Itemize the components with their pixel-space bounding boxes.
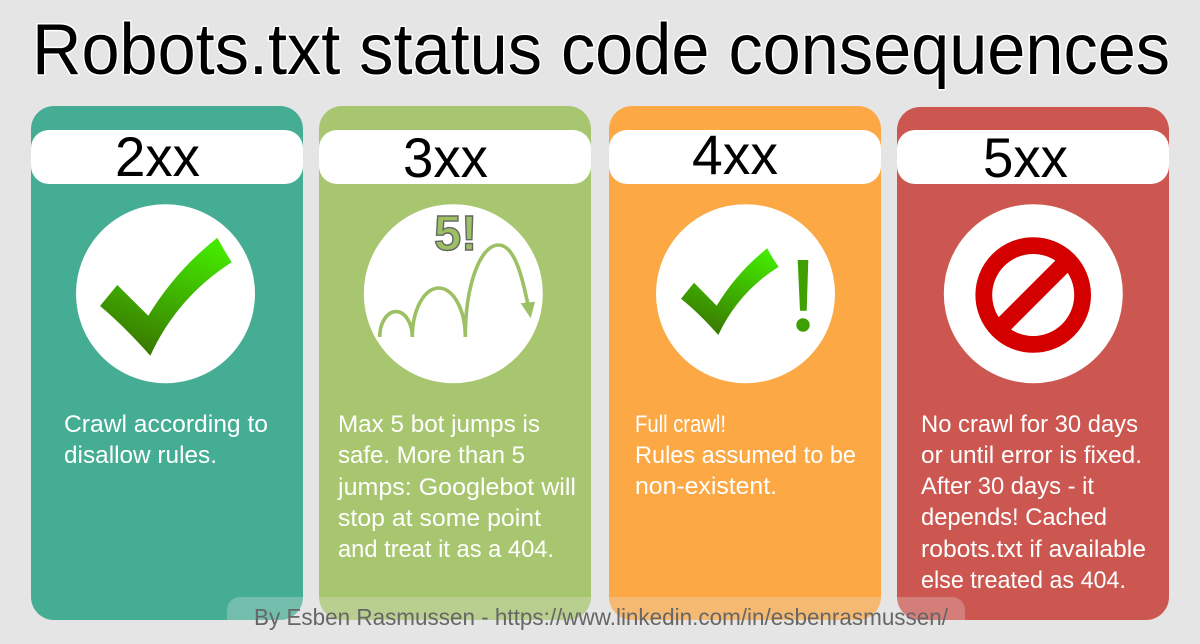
heading bar: 5xx: 5xx [983, 126, 1068, 189]
text: 5xx description: robots.txt if available [921, 536, 1146, 563]
text: 4xx description: non-existent. [635, 473, 777, 500]
text: 3xx description: safe. More than 5 [338, 442, 525, 469]
text: 4xx description [635, 411, 856, 500]
panel: 3xx [319, 106, 591, 620]
text: 4xx description: Full crawl! [635, 411, 726, 438]
arrow: bounce path [380, 245, 535, 337]
icon: prohibition sign [944, 204, 1123, 383]
icon: check with exclamation [656, 204, 835, 383]
icon: bouncing redirects [364, 204, 543, 383]
text: 2xx description [64, 411, 268, 469]
text: 3xx description: and treat it as a 404. [338, 536, 554, 563]
text: 5xx description: or until error is fixed. [921, 442, 1142, 469]
heading bar: 4xx: 4xx [692, 123, 778, 186]
heading bar: 2xx: 2xx [115, 125, 200, 188]
text: 3xx description: stop at some point [338, 505, 541, 532]
panel: 2xx [31, 106, 303, 620]
text: 5xx description: No crawl for 30 days [921, 411, 1138, 438]
footer credit: By Esben Rasmussen - https://www.linkedin.com/in/esbenrasmussen/ [254, 604, 949, 630]
text: 2xx description: disallow rules. [64, 442, 217, 469]
heading bar: 3xx: 3xx [403, 126, 488, 189]
text: 5xx description: After 30 days - it [921, 473, 1094, 500]
text: 3xx description: jumps: Googlebot will [337, 474, 576, 501]
title: Robots.txt status code consequences [32, 10, 1170, 90]
icon: green check [76, 204, 255, 383]
panel: 5xx [897, 107, 1169, 620]
text: 3xx description [337, 411, 576, 563]
heading bar: 4xx [609, 123, 881, 186]
text: 4xx description: Rules assumed to be [635, 442, 856, 469]
heading bar: 2xx [31, 125, 303, 188]
text: 5xx description: else treated as 404. [921, 567, 1126, 594]
heading bar: 5xx [897, 126, 1169, 189]
heading bar: 3xx [319, 126, 591, 189]
text: 5xx description [921, 411, 1146, 594]
panel: 4xx [609, 106, 881, 620]
text: 3xx description: Max 5 bot jumps is [338, 411, 540, 438]
text: 5xx description: depends! Cached [921, 504, 1107, 531]
label: 5!: 5! [434, 207, 477, 261]
text: 2xx description: Crawl according to [64, 411, 268, 438]
footer credit [227, 597, 965, 640]
